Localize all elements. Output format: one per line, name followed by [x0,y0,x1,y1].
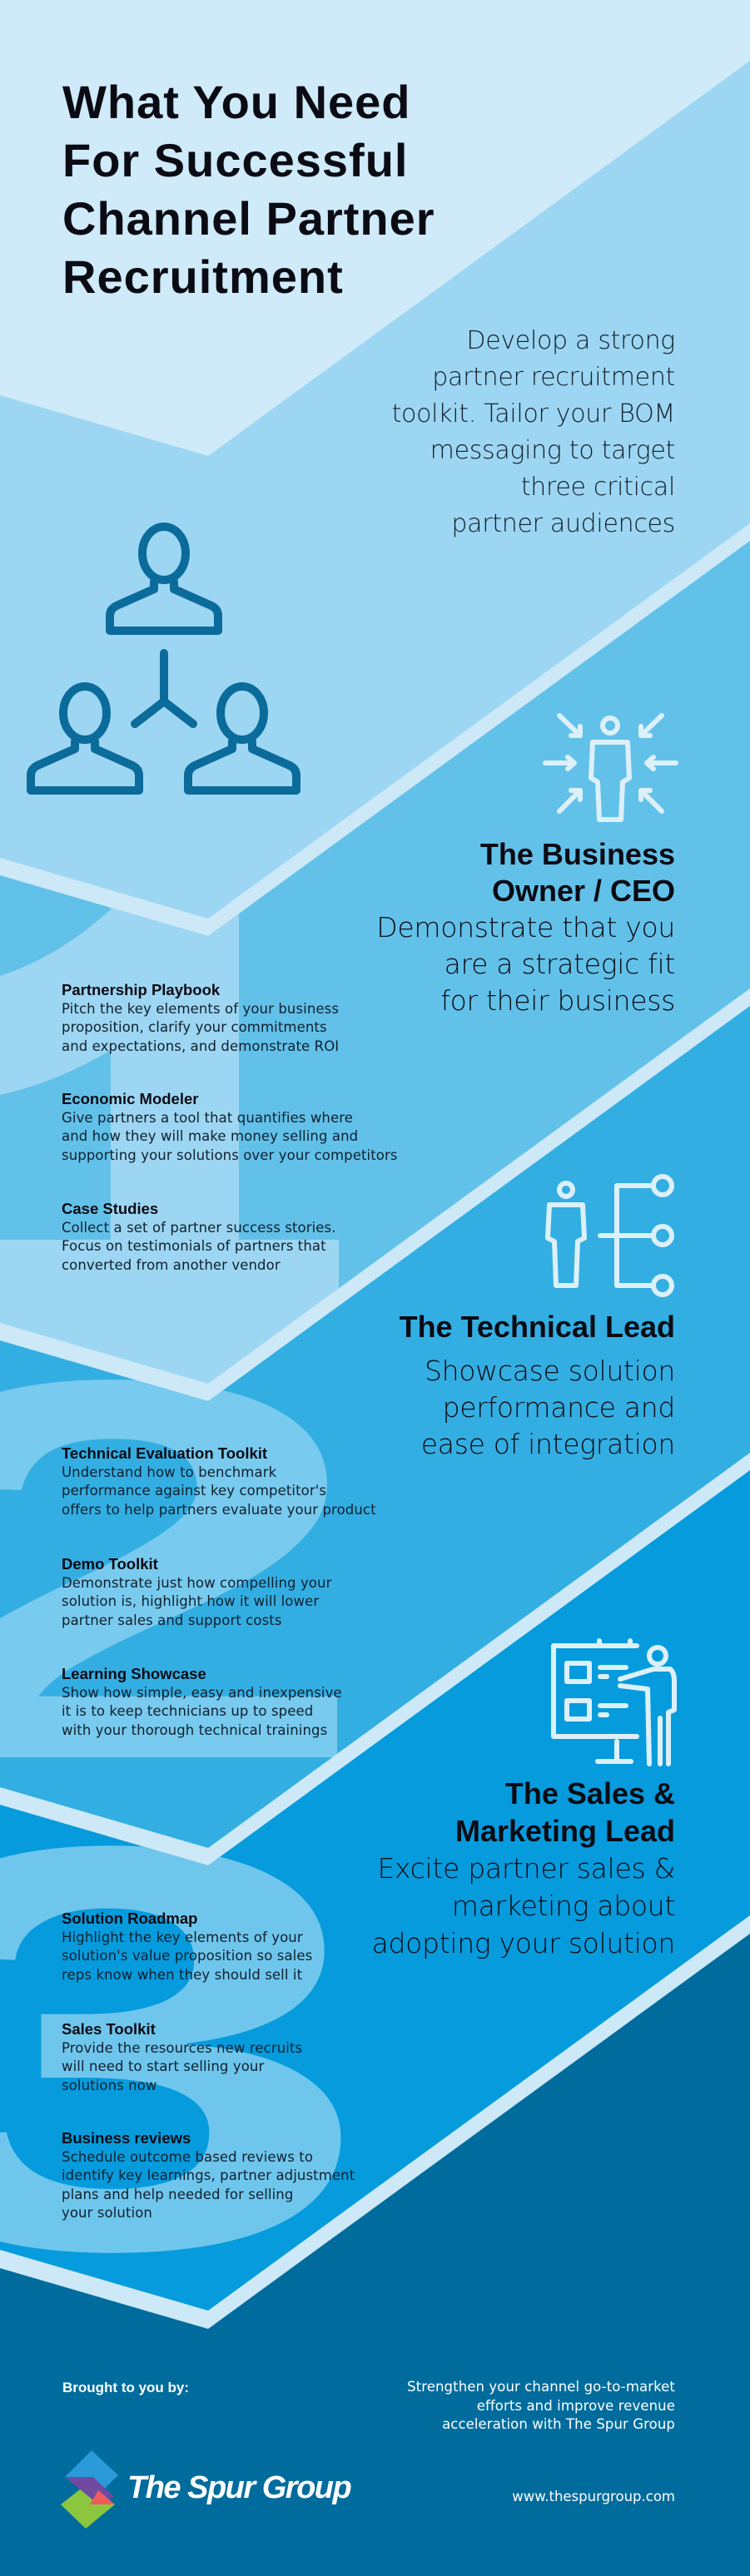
heading: sales and marketing lead: Excite partner sales & [378,1852,675,1885]
heading: technical lead [400,1310,675,1460]
heading: business owner: are a strategic fit [445,948,675,980]
item: demo toolkit: partner sales and support costs [62,1612,282,1627]
item: technical evaluation toolkit: performance against key competitor's [62,1483,326,1499]
item: technical evaluation toolkit: offers to help partners evaluate your product [62,1501,376,1518]
item: demo toolkit: Demonstrate just how compelling your [62,1574,331,1591]
item: case studies: Collect a set of partner success stories. [62,1220,336,1235]
heading: business owner: for their business [440,984,675,1017]
item: economic modeler: Give partners a tool that quantifies where [62,1110,353,1125]
intro text: messaging to target [430,436,675,465]
heading: technical lead: Showcase solution [425,1355,675,1387]
heading: business owner: Owner / CEO [492,874,675,908]
item: sales toolkit: will need to start selling your [62,2058,264,2074]
footer: call to action: Strengthen your channel go-to-market [407,2379,675,2395]
intro text: three critical [521,473,675,502]
big number 1 [0,908,339,1384]
heading: sales and marketing lead: adopting your solution [372,1927,675,1959]
item: learning showcase: Show how simple, easy and inexpensive [62,1684,342,1701]
heading: sales and marketing lead: The Sales & [505,1776,675,1811]
item: partnership playbook: Partnership Playbook [62,981,220,998]
item: sales toolkit: solutions now [62,2077,157,2093]
item: business reviews [62,2129,355,2221]
item: case studies: converted from another vendor [62,1256,281,1273]
item: technical evaluation toolkit [62,1444,376,1518]
item: sales toolkit: Sales Toolkit [62,2020,156,2038]
item: case studies: Case Studies [62,1200,158,1217]
item: technical evaluation toolkit: Technical Evaluation Toolkit [62,1444,267,1462]
title [62,76,435,303]
item: economic modeler [62,1090,398,1163]
item: technical evaluation toolkit: Understand how to benchmark [62,1464,276,1479]
item: partnership playbook: proposition, clarify your commitments [62,1019,327,1035]
item: solution roadmap [62,1910,312,1982]
footer: call to action [407,2379,675,2432]
item: business reviews: identify key learnings, partner adjustment [62,2167,355,2183]
item: demo toolkit [62,1555,331,1627]
footer: url: www.thespurgroup.com [512,2489,675,2504]
heading: technical lead: performance and [443,1391,675,1424]
item: partnership playbook: and expectations, and demonstrate ROI [62,1038,339,1053]
heading: sales and marketing lead: Marketing Lead [455,1814,675,1848]
item: demo toolkit: solution is, highlight how it will lower [62,1593,319,1609]
footer: call to action: acceleration with The Spur Group [442,2416,675,2432]
icon: partner network [27,523,300,795]
item: economic modeler: supporting your solutions over your competitors [62,1147,398,1163]
item: learning showcase [62,1665,342,1737]
item: economic modeler: Economic Modeler [62,1090,198,1107]
item: case studies [62,1200,336,1273]
heading: technical lead: ease of integration [421,1428,675,1460]
item: business reviews: your solution [62,2205,152,2221]
item: business reviews: Schedule outcome based reviews to [62,2148,313,2165]
item: solution roadmap: Solution Roadmap [62,1910,197,1927]
heading: business owner: Demonstrate that you [376,911,675,944]
heading: sales and marketing lead: marketing about [452,1890,675,1922]
items: section 3 [62,1910,355,2221]
heading: business owner: The Business [480,837,675,871]
icon: business owner focus [543,713,678,822]
title: Recruitment [62,250,344,303]
logo: The Spur Group [61,2450,351,2529]
item: learning showcase: with your thorough technical trainings [62,1722,327,1737]
item: business reviews: plans and help needed for selling [62,2187,293,2202]
item: business reviews: Business reviews [62,2129,191,2147]
item: sales toolkit: Provide the resources new recruits [62,2040,302,2055]
footer: brought to you by: Brought to you by: [62,2380,189,2395]
item: solution roadmap: solution's value proposition so sales [62,1948,312,1964]
item: learning showcase: it is to keep technicians up to speed [62,1703,313,1719]
icon: technical lead [545,1174,674,1297]
item: learning showcase: Learning Showcase [62,1665,206,1682]
item: partnership playbook: Pitch the key elements of your business [62,1000,339,1017]
intro text: partner audiences [451,509,675,538]
intro text: Develop a strong [466,326,675,355]
heading: business owner [376,837,675,1017]
icon: sales presentation [551,1638,677,1766]
item: partnership playbook [62,981,339,1053]
intro text: toolkit. Tailor your BOM [392,399,675,429]
heading: technical lead: The Technical Lead [400,1310,675,1344]
item: solution roadmap: reps know when they should sell it [62,1967,302,1982]
intro text [392,326,675,538]
footer: call to action: efforts and improve revenue [477,2398,675,2413]
item: solution roadmap: Highlight the key elements of your [62,1929,303,1945]
items: section 2 [62,1444,376,1737]
title: For Successful [62,134,408,186]
logo: The Spur Group: The Spur Group [127,2470,351,2505]
item: sales toolkit [62,2020,302,2093]
intro text: partner recruitment [432,363,675,392]
item: demo toolkit: Demo Toolkit [62,1555,158,1573]
item: case studies: Focus on testimonials of partners that [62,1238,326,1254]
item: economic modeler: and how they will make money selling and [62,1128,358,1144]
items: section 1 [62,981,398,1273]
title: What You Need [62,76,411,128]
heading: sales and marketing lead [372,1776,675,1959]
title: Channel Partner [62,192,435,245]
